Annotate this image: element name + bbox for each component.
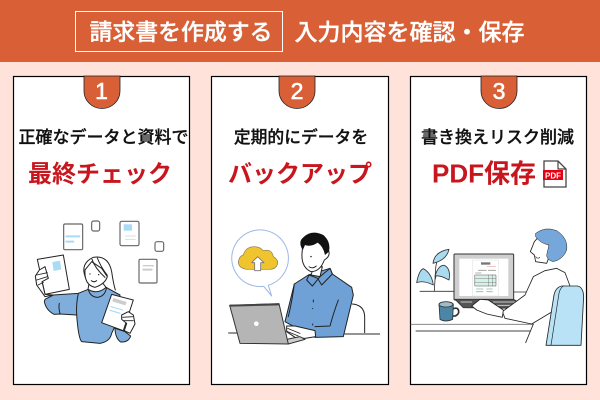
panel: PDF save [410,76,586,384]
badge 2: 2 [291,78,303,104]
right hand [122,312,135,333]
collar [307,268,332,286]
desk [411,323,533,326]
header active tab: 請求書を作成する [89,19,273,45]
head and hair [530,233,552,263]
panel 3 heading: PDF保存 [432,158,536,188]
badge 3 [481,76,517,108]
floating documents [64,221,164,283]
illustration: man at laptop [229,230,380,344]
left document [37,255,69,294]
illustration: person checking PDF at monitor [411,229,584,345]
body [502,268,570,324]
badge 3: 3 [493,78,505,104]
hand [472,299,503,317]
icon: PDF file [543,161,566,187]
head [302,242,329,272]
sweater [44,287,120,343]
plant [417,249,449,291]
mug [439,302,459,321]
badge 1 [84,76,120,108]
face and hair [88,282,106,292]
panel 3 caption: 書き換えリスク削減 [421,128,574,147]
panel 1 heading: 最終チェック [28,161,172,188]
header band [0,0,600,62]
speech bubble with cloud [232,230,288,296]
panel 2 heading: バックアップ [228,161,372,188]
header subtitle: 入力内容を確認・保存 [294,19,524,45]
left hand [35,267,53,297]
shirt [285,268,353,337]
panel 2 caption: 定期的にデータを [234,127,368,147]
keyboard [455,299,522,308]
icon: PDF file: PDF [545,172,561,180]
panel 1 caption: 正確なデータと資料で [18,127,188,147]
chair [546,286,584,345]
laptop [287,337,305,344]
header active tab [76,12,282,52]
panel: final check [14,76,190,384]
panel: backup [212,76,388,384]
hand [287,326,316,338]
badge 1: 1 [95,78,108,104]
monitor [454,254,514,300]
desk and chair [229,333,380,334]
illustration: woman checking documents [35,221,164,343]
right document [102,294,133,331]
badge 2 [279,76,315,108]
back desk line [420,290,529,293]
invoice on screen [473,260,499,296]
